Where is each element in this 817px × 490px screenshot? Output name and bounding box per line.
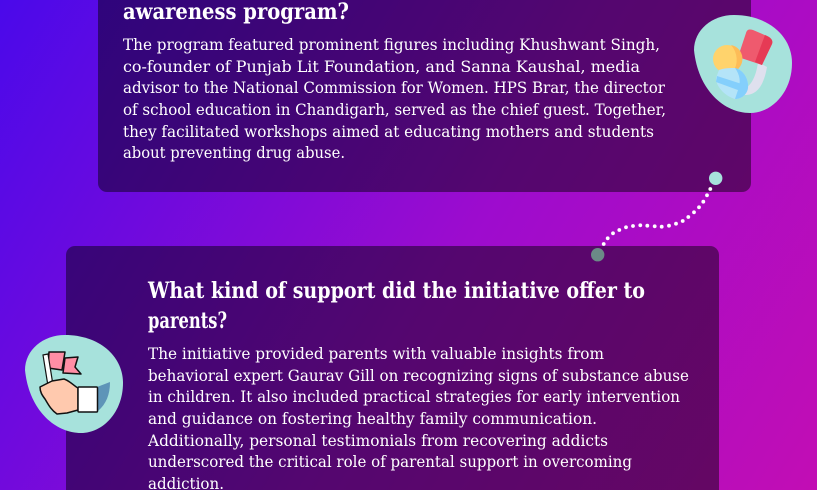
text block: program description: they facilitated workshops aimed at educating mothers and students xyxy=(123,123,654,141)
text block: support description: behavioral expert Gaurav Gill on recognizing signs of substance abuse xyxy=(148,367,689,385)
heading: parent support question xyxy=(147,278,645,334)
connector: dotted path xyxy=(602,172,722,246)
text block: program description: The program featured prominent figures including Khushwant Singh, xyxy=(123,36,660,54)
text block: support description: in children. It also included practical strategies for early intervention xyxy=(148,388,680,406)
text block: support description: Additionally, personal testimonials from recovering addicts xyxy=(147,432,608,450)
text block: program description: advisor to the National Commission for Women. HPS Brar, the director xyxy=(123,79,666,97)
text block: program description: about preventing drug abuse. xyxy=(123,144,345,162)
text block: program description xyxy=(123,36,666,162)
heading: parent support question: parents? xyxy=(148,308,227,334)
icon: hand holding flag xyxy=(25,335,123,433)
panel: parent support xyxy=(66,246,719,490)
text block: support description: The initiative provided parents with valuable insights from xyxy=(148,345,604,363)
text block: support description: and guidance on fostering healthy family communication. xyxy=(148,410,597,428)
text block: program description: co-founder of Punjab Lit Foundation, and Sanna Kaushal, media xyxy=(123,58,640,76)
heading: parent support question: What kind of support did the initiative offer to xyxy=(147,278,645,304)
panel: awareness program xyxy=(98,0,751,192)
text block: support description: underscored the critical role of parental support in overcoming xyxy=(148,453,632,471)
text block: support description xyxy=(147,345,689,490)
text block: program description: of school education in Chandigarh, served as the chief guest. Together, xyxy=(123,101,666,119)
icon: pills xyxy=(694,15,792,113)
